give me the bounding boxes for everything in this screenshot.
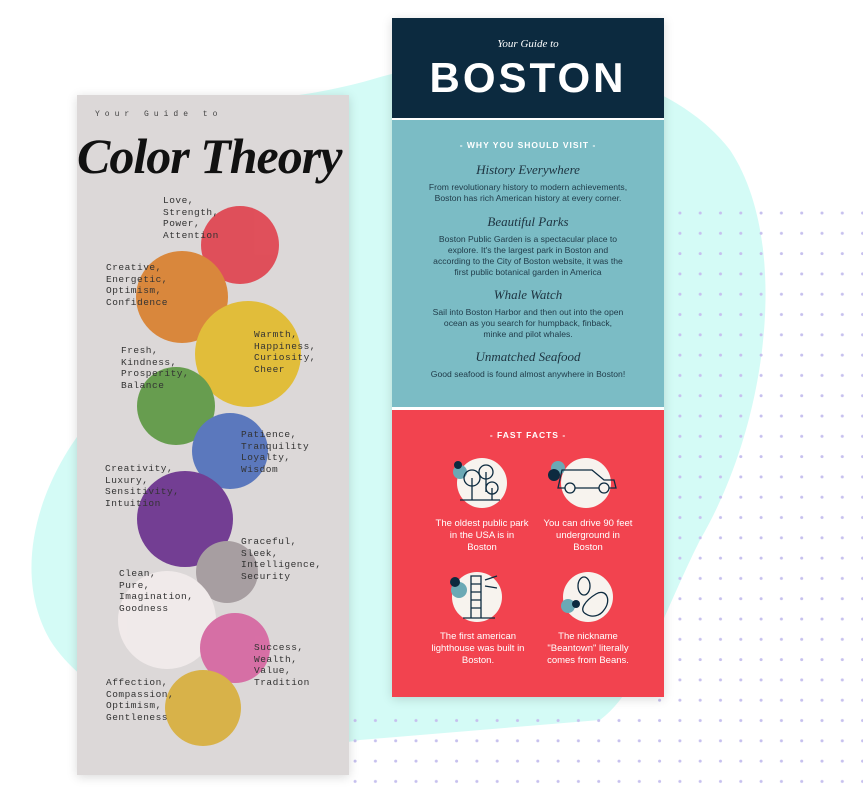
section: why visit: Boston Public Garden is a spectacular place to [439,234,617,244]
fact text 3: The first american lighthouse was built in Boston. [432,631,524,666]
header [392,18,664,118]
panel: color theory card: Fresh, [121,345,158,356]
panel: color theory card: Loyalty, [241,452,291,463]
section: why visit: minke and pilot whales. [483,329,573,339]
icon: car [548,458,617,508]
panel: color theory card: Sleek, [241,548,278,558]
icon: lighthouse [450,572,502,622]
panel: color theory card: Confidence [106,296,168,308]
section: why visit: Beautiful Parks [487,214,569,229]
section: why visit: explore. It's the largest park in Boston and [448,245,608,255]
panel: color theory card: Goodness [119,602,169,614]
title: Color Theory [77,128,341,184]
panel: color theory card: Gentleness [106,712,168,722]
panel: color theory card: Balance [121,380,164,390]
subtitle: Your Guide to [95,110,222,119]
section: why visit: History Everywhere [476,162,580,177]
icon: trees [453,458,507,508]
panel: color theory card: Wealth, [254,654,297,664]
header: Your Guide to [497,38,559,50]
section: why visit: Sail into Boston Harbor and then out into the open [433,307,623,317]
panel: color theory card: Success, [254,642,304,653]
panel: color theory card: Tradition [254,676,310,688]
panel: color theory card: Sensitivity, [105,486,179,497]
panel: color theory card: Compassion, [106,688,174,700]
panel: color theory card: Pure, [119,580,150,590]
panel: color theory card: Security [241,570,291,582]
icon: beans [561,572,613,622]
panel: color theory card: Luxury, [105,474,148,486]
labels: Power, [163,218,200,229]
panel: color theory card: Graceful, [241,536,297,547]
panel: color theory card: Curiosity, [254,352,316,363]
panel: color theory card [77,95,349,775]
fact text 4: The nickname "Beantown" literally comes from Beans. [547,631,629,666]
section: why visit: according to the City of Boston website, it was the [433,256,623,266]
section: why visit: Unmatched Seafood [475,349,581,364]
panel: color theory card: Kindness, [121,356,177,368]
section: why visit: Boston has rich American history at every corner. [435,193,621,203]
labels: Love, [163,195,194,206]
panel: color theory card: Warmth, [254,329,297,340]
panel: color theory card: Creative, [106,262,162,273]
panel: color theory card: Happiness, [254,340,316,352]
fact text 1: The oldest public park in the USA is in Boston [436,518,528,553]
section: why visit: ocean as you search for humpback, finback, [444,318,612,328]
section: fast facts: - FAST FACTS - [490,430,566,440]
labels: Strength, [163,206,219,218]
section: why visit: Good seafood is found almost anywhere in Boston! [431,369,625,379]
panel: color theory card: Creativity, [105,463,173,474]
section: why visit: From revolutionary history to modern achievements, [429,182,627,192]
panel: color theory card: Prosperity, [121,368,189,379]
panel: color theory card: Optimism, [106,700,162,711]
panel: color theory card: Tranquility [241,440,309,452]
panel: color theory card: Patience, [241,429,297,440]
panel: color theory card: Intuition [105,498,161,508]
panel: color theory card: Affection, [106,677,168,688]
panel: color theory card: Cheer [254,364,285,374]
section: why visit: first public botanical garden in America [454,267,602,277]
section: why visit [392,120,664,407]
panel: boston card [392,18,664,697]
labels [163,195,219,240]
circles chart [118,206,301,746]
panel: color theory card: Clean, [119,568,156,579]
panel: color theory card: Optimism, [106,285,162,296]
panel: color theory card: Value, [254,665,291,676]
panel: color theory card: Intelligence, [241,559,322,570]
panel: color theory card: Energetic, [106,274,168,284]
section: why visit: - WHY YOU SHOULD VISIT - [460,140,596,150]
header: BOSTON [430,54,626,101]
labels: Attention [163,230,219,240]
panel: color theory card: Wisdom [241,464,278,474]
section: why visit: Whale Watch [494,287,562,302]
fact text 2: You can drive 90 feet underground in Boston [544,518,632,553]
section: fast facts [392,410,664,697]
panel: color theory card: Imagination, [119,591,193,602]
